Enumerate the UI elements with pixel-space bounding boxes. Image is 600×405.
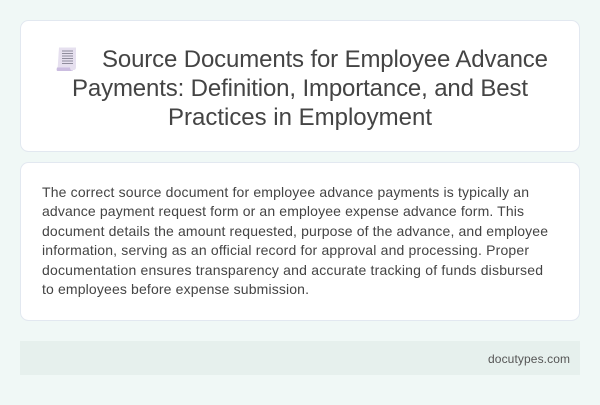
text block: description: documentation ensures transparency and accurate tracking of funds disbursed: [42, 262, 543, 278]
text block: description: [42, 184, 548, 297]
panel: footer bar: [20, 341, 580, 375]
title: Payments: Definition, Importance, and Best: [72, 75, 528, 102]
title: Source Documents for Employee Advance: [102, 46, 548, 73]
title: Practices in Employment: [168, 104, 432, 131]
text block: description: advance payment request form or an employee expense advance form. This: [42, 203, 524, 219]
text block: description: The correct source document for employee advance payments is typically an: [42, 184, 529, 200]
panel: description card: [20, 162, 580, 320]
text block: description: information, serving as an official record for approval and processing. Proper: [42, 242, 529, 258]
text block: description: document details the amount requested, purpose of the advance, and employee: [42, 223, 548, 239]
text block: description: to employees before expense submission.: [42, 281, 309, 297]
panel: title card: [20, 20, 580, 152]
footer source text: docutypes.com: [488, 352, 570, 366]
title: [72, 46, 548, 131]
icon: receipt document: [57, 48, 76, 71]
